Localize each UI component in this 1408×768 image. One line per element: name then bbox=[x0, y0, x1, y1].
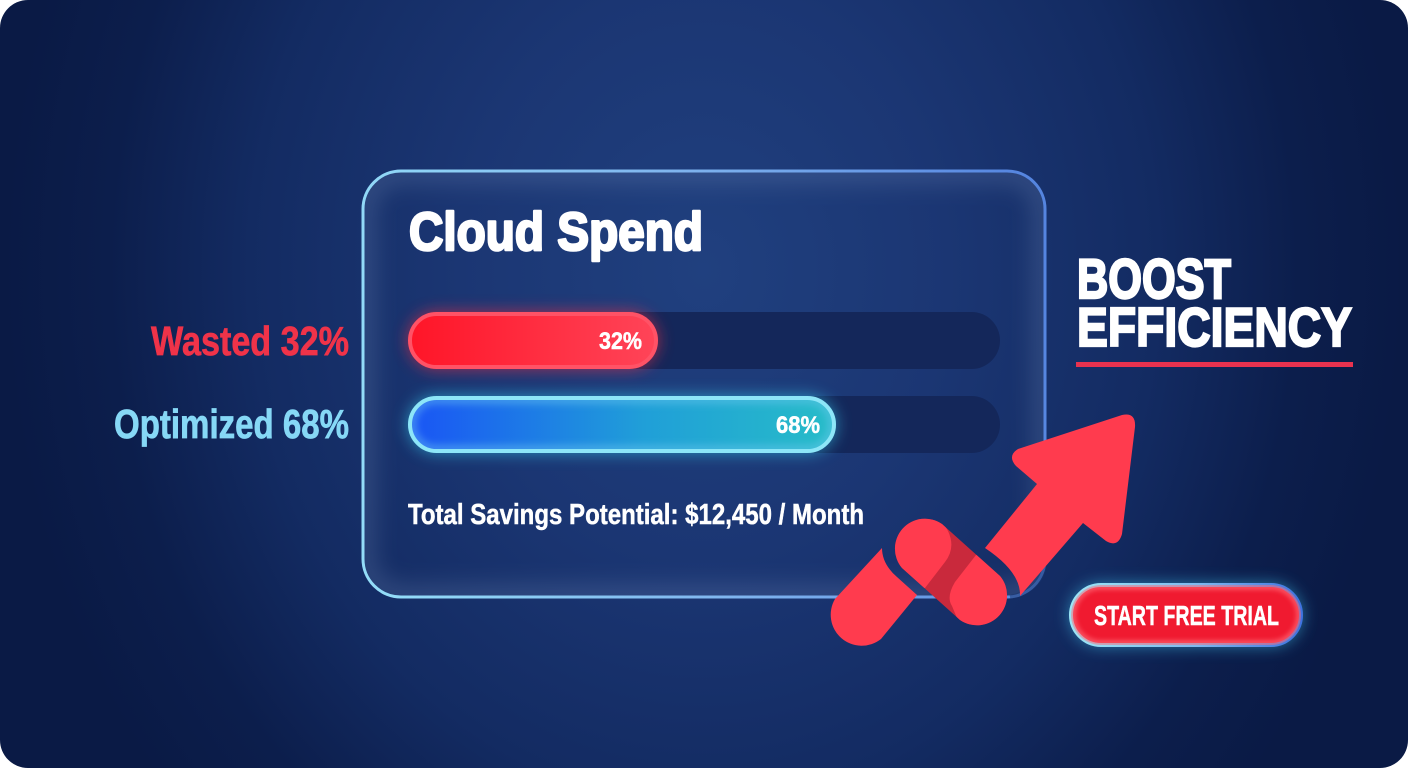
card border bbox=[363, 171, 1045, 597]
heading: Cloud Spend: Cloud Spend bbox=[409, 202, 703, 262]
bar track: wasted bbox=[408, 312, 1000, 369]
heading: boost efficiency bbox=[1076, 247, 1353, 367]
bar: wasted 32% bbox=[408, 312, 658, 369]
card glass fill bbox=[363, 171, 1045, 597]
label: Optimized 68%: Optimized 68% bbox=[114, 401, 349, 447]
arrow head and upper shaft bbox=[985, 414, 1135, 596]
heading: boost efficiency: BOOST bbox=[1077, 247, 1231, 310]
value: 68%: 68% bbox=[776, 412, 820, 439]
bar track: optimized bbox=[408, 396, 1000, 453]
value: 32%: 32% bbox=[599, 328, 642, 355]
arrow lower tail bbox=[831, 548, 917, 646]
bar: optimized 68% bbox=[408, 396, 836, 453]
heading: boost efficiency: EFFICIENCY bbox=[1077, 296, 1352, 358]
heading underline bbox=[1076, 362, 1353, 367]
icon: red growth arrow bbox=[831, 414, 1135, 646]
button label: START FREE TRIAL bbox=[1094, 600, 1279, 631]
arrow middle capsule bbox=[894, 518, 1008, 626]
label: Wasted 32%: Wasted 32% bbox=[151, 318, 349, 364]
text: total savings potential: Total Savings Potential: $12,450 / Month bbox=[408, 499, 864, 531]
button: start free trial bbox=[1070, 584, 1302, 646]
panel: cloud spend card bbox=[363, 171, 1045, 597]
